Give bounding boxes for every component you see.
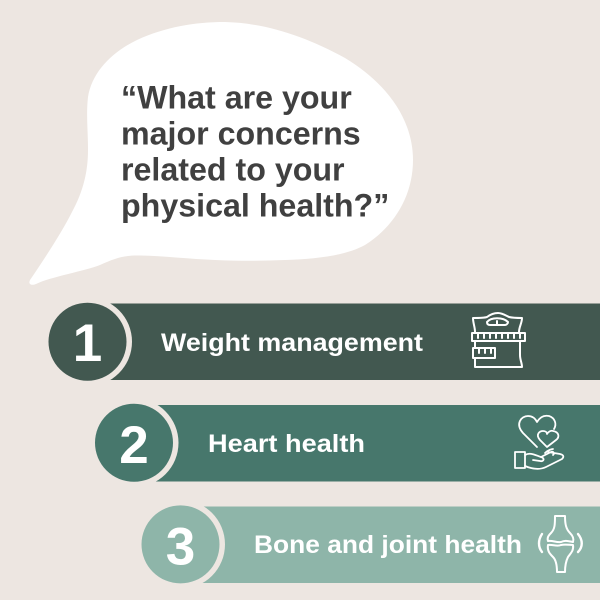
bar 2 — [147, 405, 600, 482]
item 3: bone and joint health — [136, 500, 600, 589]
heading: quote: major concerns — [121, 116, 361, 152]
icon: scale with measuring tape — [472, 313, 525, 367]
number badge 3: 3 — [166, 518, 195, 576]
number badge 2: 2 — [119, 416, 149, 475]
item 2: heart health — [90, 398, 600, 487]
icon: hand holding hearts — [515, 416, 563, 469]
heading: quote: physical health?” — [121, 188, 389, 224]
heading: quote — [121, 80, 389, 224]
number badge 1 — [43, 297, 132, 386]
label 2: Heart health — [208, 430, 365, 458]
bar 3 — [194, 506, 600, 583]
label 1: Weight management — [161, 329, 424, 357]
icon: knee joint — [539, 516, 582, 572]
item 1: weight management — [43, 297, 600, 386]
number badge 3 — [136, 500, 225, 589]
heading: quote: related to your — [121, 152, 345, 188]
label 3: Bone and joint health — [254, 531, 522, 559]
number badge 2 — [90, 398, 178, 487]
number badge 1: 1 — [73, 314, 102, 373]
bar 1 — [100, 304, 600, 380]
speech bubble — [29, 22, 413, 285]
heading: quote: “What are your — [121, 80, 352, 116]
